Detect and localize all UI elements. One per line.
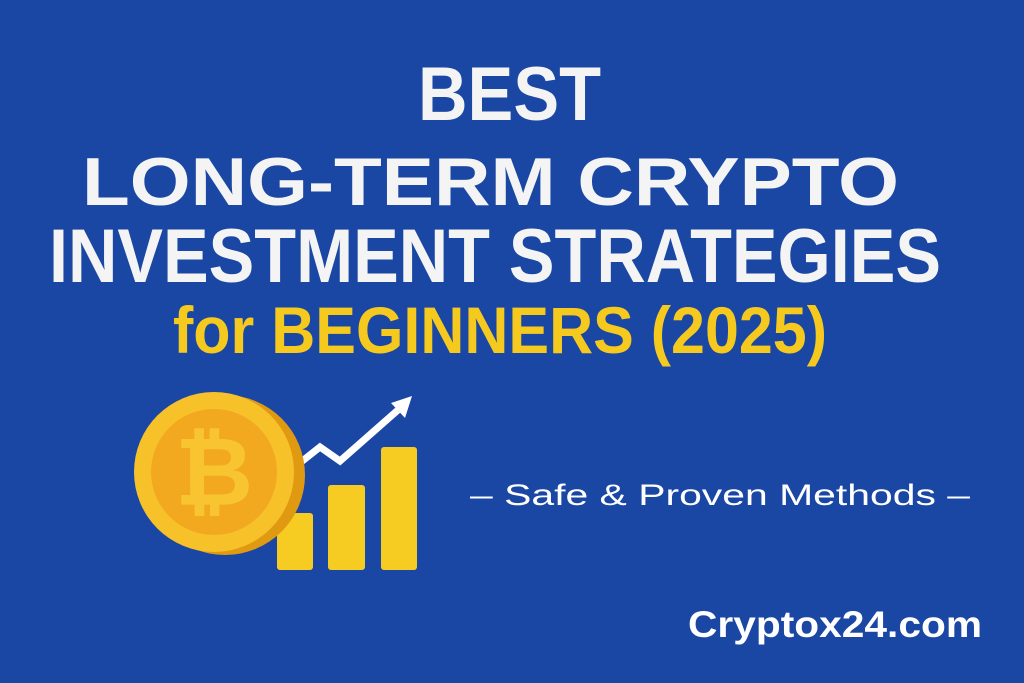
title: LONG-TERM CRYPTO: [82, 144, 899, 220]
title: [49, 52, 941, 299]
title: BEST: [418, 52, 601, 137]
icon: bitcoin coin with growth chart: [134, 392, 417, 570]
coin: ₿: [175, 419, 253, 526]
subtitle: for beginners: for BEGINNERS (2025): [173, 293, 827, 367]
bar chart: [277, 447, 417, 570]
tagline: – Safe & Proven Methods –: [470, 479, 970, 512]
arrow: [296, 396, 412, 466]
coin: [134, 392, 305, 555]
website: Cryptox24.com: [688, 604, 982, 645]
title: INVESTMENT STRATEGIES: [49, 214, 941, 299]
